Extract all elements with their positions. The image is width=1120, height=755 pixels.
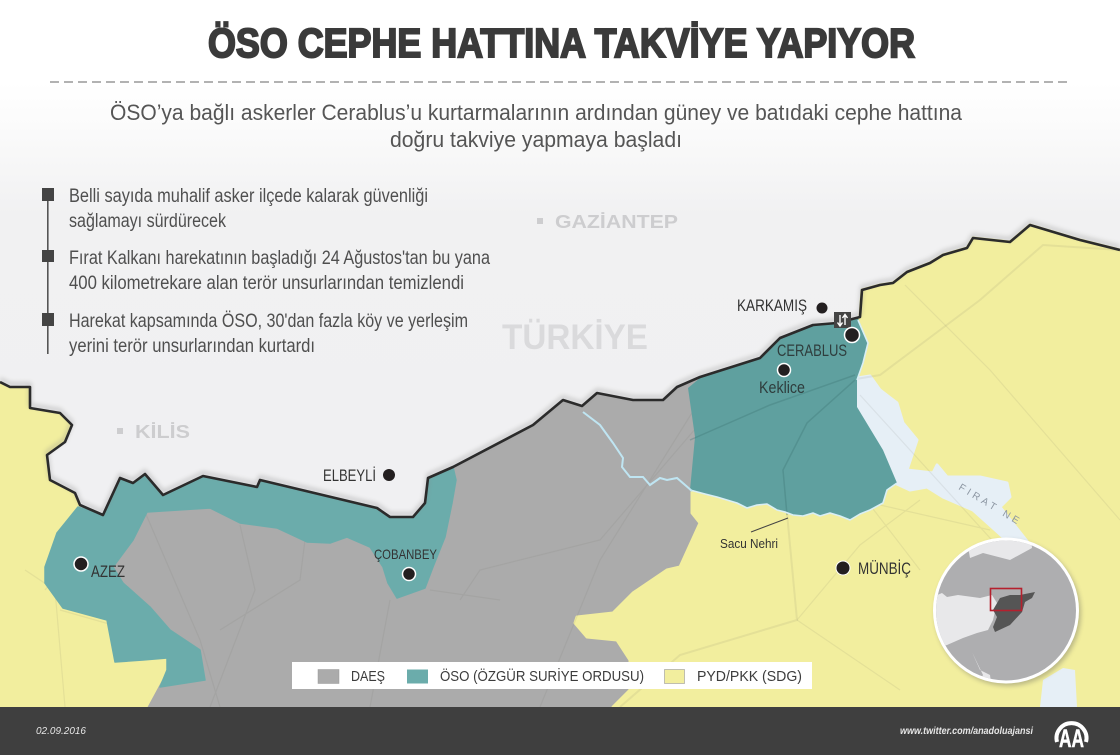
bullet 1: Belli sayıda muhalif asker ilçede kalarak güvenliği xyxy=(69,186,428,207)
inset: Red Sea gulf xyxy=(973,654,990,678)
inset: Mediterranean Sea xyxy=(936,593,997,646)
city: Çobanbey: ÇOBANBEY xyxy=(374,546,438,562)
inset: Black Sea xyxy=(968,540,1032,560)
roads inside ÖSO east xyxy=(690,375,855,515)
city: Azez xyxy=(74,557,125,581)
territory: ÖSO west xyxy=(45,467,456,687)
river: Sacu xyxy=(583,412,692,491)
title: ÖSO CEPHE HATTINA TAKVİYE YAPIYOR xyxy=(208,20,915,66)
legend item: DAEŞ: DAEŞ xyxy=(351,668,385,685)
bullet 3 xyxy=(42,311,468,357)
icon: Anadolu Agency logo: AA xyxy=(1059,725,1084,753)
label: Kilis: KİLİS xyxy=(135,422,190,442)
map background: Turkey xyxy=(0,82,1120,522)
city: Azez: AZEZ xyxy=(91,562,125,581)
bullet 3: Harekat kapsamında ÖSO, 30'dan fazla köy ve yerleşim xyxy=(69,311,468,332)
city: Çobanbey xyxy=(374,546,438,580)
bullet 2 xyxy=(42,248,490,294)
date: 02.09.2016 xyxy=(36,726,86,737)
label: Kilis xyxy=(117,422,190,442)
legend item: PYD/PKK: PYD/PKK (SDG) xyxy=(697,668,802,685)
city: Münbiç xyxy=(836,559,911,578)
river edge: ÖSO east xyxy=(690,320,897,520)
social link: www.twitter.com/anadoluajansi xyxy=(900,725,1034,737)
city: Elbeyli: ELBEYLİ xyxy=(323,466,376,485)
territory: ÖSO east xyxy=(688,318,897,520)
map: territories of control xyxy=(0,225,1120,707)
territory: PYD/PKK west xyxy=(0,382,167,707)
footer bar xyxy=(0,707,1120,755)
city: Cerablus: CERABLUS xyxy=(777,341,847,360)
inset locator map xyxy=(932,538,1084,688)
subtitle: doğru takviye yapmaya başladı xyxy=(390,127,682,152)
inset: Syria xyxy=(993,592,1035,632)
bullet timeline line xyxy=(47,195,49,354)
legend item: DAEŞ xyxy=(318,668,385,685)
subtitle xyxy=(110,100,963,152)
Turkey-Syria border xyxy=(0,222,1120,517)
bullet list xyxy=(42,186,490,357)
city: Keklice xyxy=(759,364,805,397)
label: Fırat Nehri: FIRAT NE xyxy=(956,482,1024,529)
river: Euphrates lower reach xyxy=(1040,668,1077,707)
label: Türkiye: TÜRKİYE xyxy=(502,318,648,357)
callout: Sacu Nehri: Sacu Nehri xyxy=(720,537,778,551)
roads xyxy=(25,245,1120,707)
icon: Anadolu Agency logo xyxy=(1056,723,1086,753)
territory: PYD/PKK east xyxy=(575,225,1120,707)
bullet 2: Fırat Kalkanı harekatının başladığı 24 Ağustos'tan bu yana xyxy=(69,248,490,269)
icon: border crossing xyxy=(834,312,851,328)
legend item: ÖSO: ÖSO (ÖZGÜR SURİYE ORDUSU) xyxy=(440,667,644,685)
bullet 1: sağlamayı sürdürecek xyxy=(69,211,226,232)
inset: highlight rectangle xyxy=(990,588,1022,610)
label: Gaziantep: GAZİANTEP xyxy=(555,212,678,232)
city: Karkamış: KARKAMIŞ xyxy=(737,296,807,315)
territory: DAEŞ xyxy=(72,378,720,707)
city: Keklice: Keklice xyxy=(759,379,805,397)
subtitle: ÖSO’ya bağlı askerler Cerablus’u kurtarmalarının ardından güney ve batıdaki cephe hattına xyxy=(110,100,963,125)
river: Euphrates xyxy=(857,376,1030,545)
bullet 2: 400 kilometrekare alan terör unsurlarından temizlendi xyxy=(69,273,464,294)
city: Cerablus xyxy=(777,328,860,360)
bullet 1 xyxy=(42,186,428,232)
city: Münbiç: MÜNBİÇ xyxy=(858,559,911,578)
legend xyxy=(292,662,812,689)
callout: Sacu Nehri xyxy=(720,518,788,551)
dashed divider xyxy=(50,81,1072,83)
bullet 3: yerini terör unsurlarından kurtardı xyxy=(69,336,315,357)
